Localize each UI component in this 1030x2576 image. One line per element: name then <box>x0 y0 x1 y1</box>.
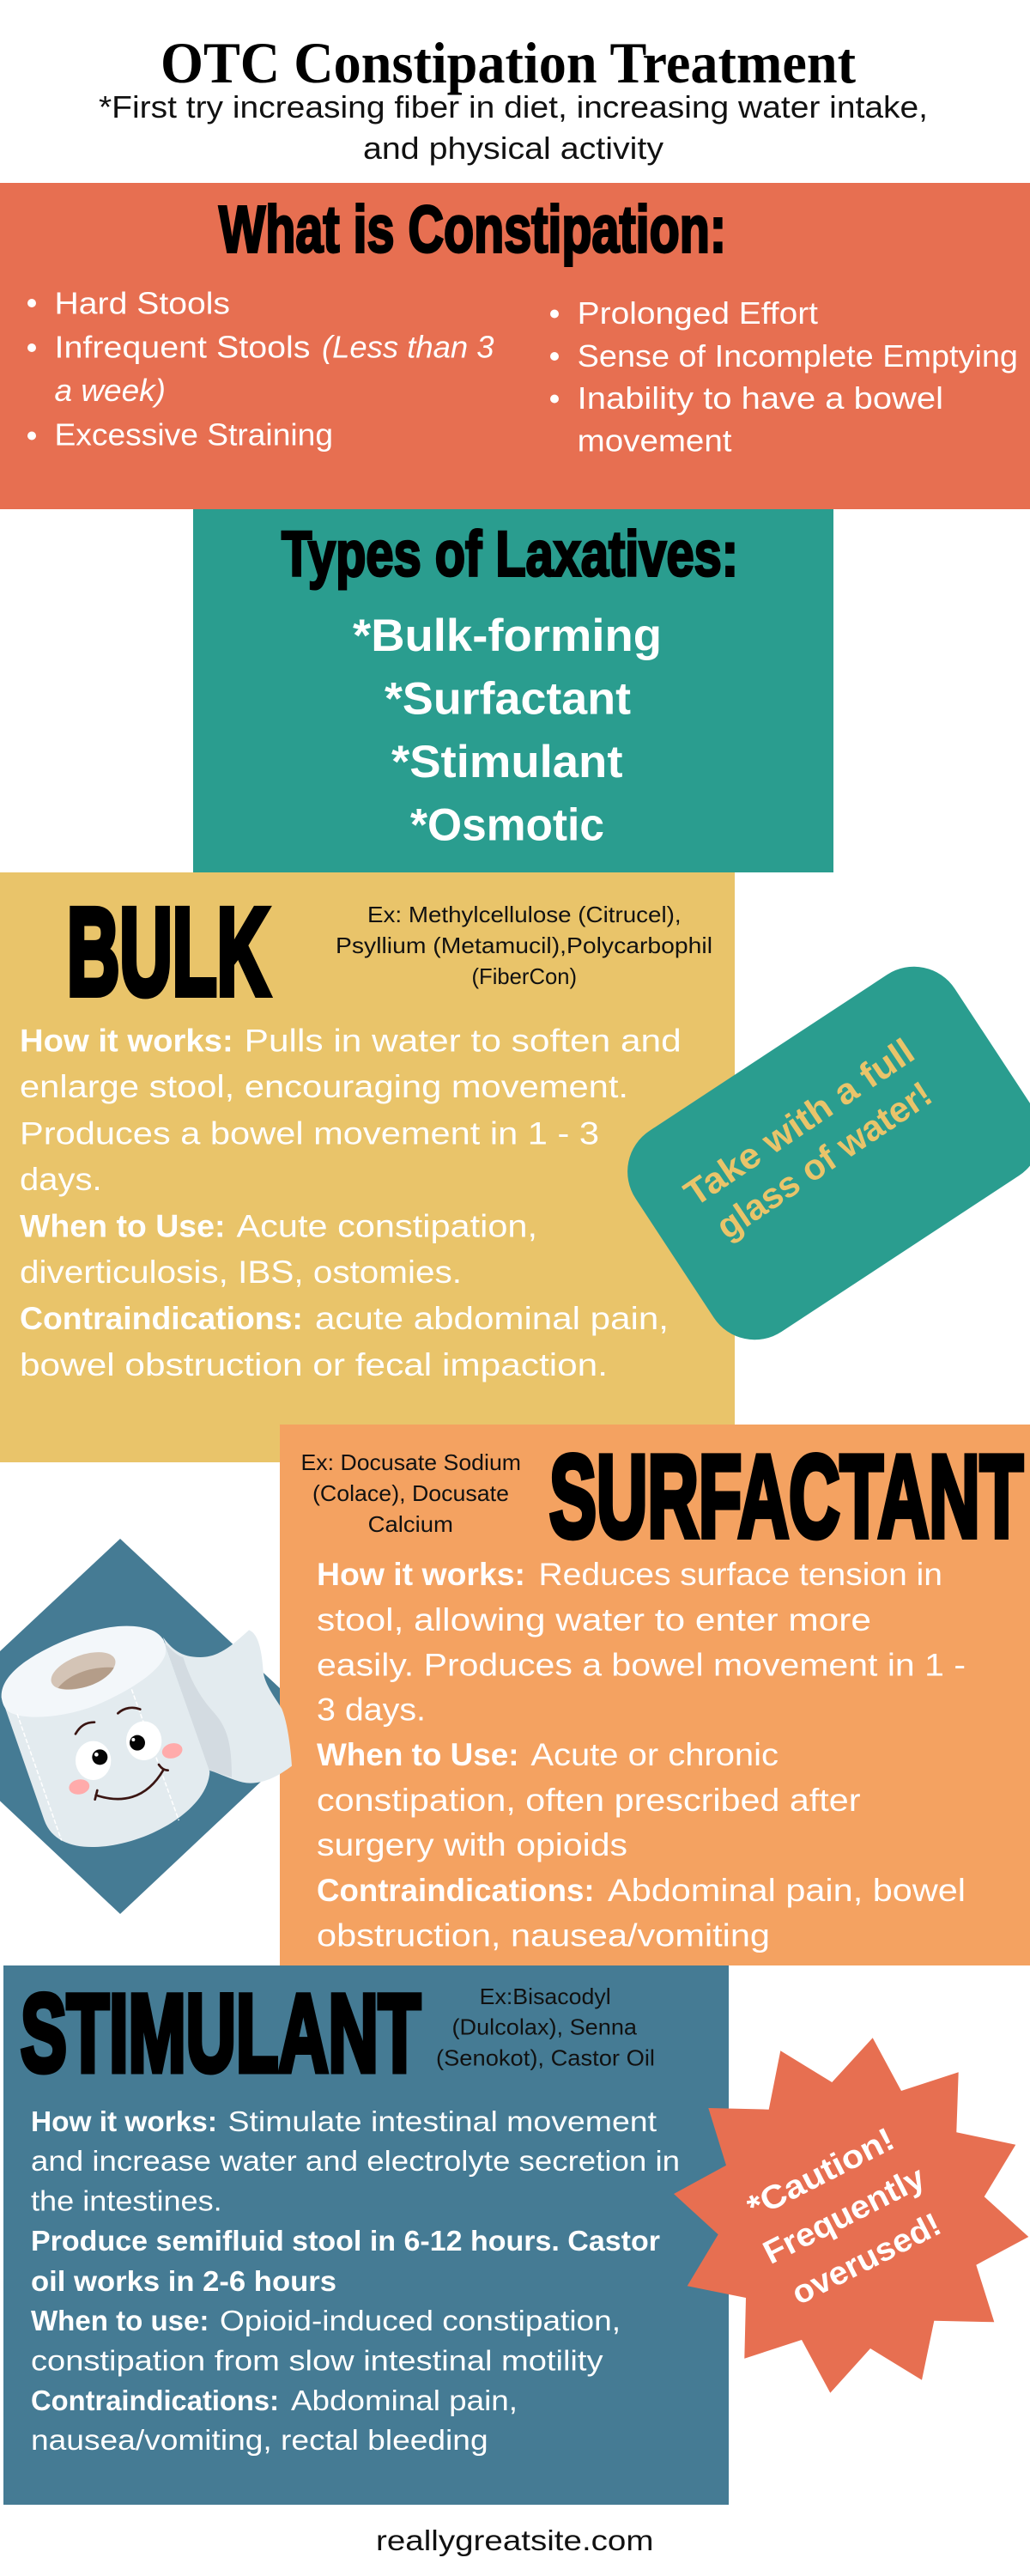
text block: surfactant details: How it works: <box>317 1557 525 1592</box>
text block: bulk details <box>20 1024 682 1382</box>
text block: stimulant details: oil works in 2-6 hours <box>31 2265 336 2297</box>
examples: stimulant: (Senokot), Castor Oil <box>436 2045 655 2071</box>
callout: caution starburst: Frequently <box>758 2160 930 2272</box>
examples: bulk: (FiberCon) <box>472 963 577 989</box>
panel: what is constipation <box>0 183 1030 509</box>
text block: bulk details: Contraindications: <box>20 1301 303 1336</box>
examples: stimulant: (Dulcolax), Senna <box>451 2014 638 2040</box>
callout: caution starburst <box>674 2038 1028 2393</box>
examples: bulk <box>336 902 712 989</box>
text block: stimulant details <box>31 2105 680 2456</box>
icon: blue diamond <box>0 1539 320 1914</box>
callout: take with water: glass of water! <box>709 1073 939 1247</box>
text block: stimulant details: Stimulate intestinal movement <box>228 2105 657 2137</box>
heading: what is constipation: What is Constipation: <box>219 192 726 266</box>
list: laxative types: *Bulk-forming <box>353 611 662 661</box>
panel: types of laxatives <box>193 509 833 872</box>
list: right symptoms: movement <box>578 422 731 459</box>
subtitle: and physical activity <box>363 131 663 166</box>
list: laxative types <box>353 611 662 850</box>
text block: stimulant details: the intestines. <box>31 2184 222 2217</box>
text block: bulk details: Pulls in water to soften and <box>245 1024 682 1059</box>
panel: bulk <box>0 872 735 1462</box>
text block: stimulant details: Opioid-induced constipation, <box>220 2305 621 2336</box>
list: left symptoms <box>27 285 494 452</box>
examples: surfactant: Calcium <box>368 1511 453 1537</box>
examples: surfactant: Ex: Docusate Sodium <box>300 1449 521 1475</box>
subtitle <box>99 89 928 166</box>
list: laxative types: *Osmotic <box>410 800 604 850</box>
examples: surfactant <box>300 1449 521 1537</box>
callout: caution starburst: overused! <box>786 2207 947 2312</box>
subtitle: *First try increasing fiber in diet, increasing water intake, <box>99 89 928 125</box>
list: right symptoms: Inability to have a bowel <box>578 380 943 416</box>
text block: stimulant details: constipation from slow intestinal motility <box>31 2345 603 2377</box>
text block: stimulant details: nausea/vomiting, rectal bleeding <box>31 2424 488 2456</box>
list: left symptoms: Infrequent Stools <box>55 330 311 364</box>
text block: surfactant details: surgery with opioids <box>317 1827 627 1862</box>
text block: surfactant details: constipation, often prescribed after <box>317 1783 860 1818</box>
text block: bulk details: When to Use: <box>20 1209 225 1244</box>
text block: surfactant details: easily. Produces a bowel movement in 1 - <box>317 1647 966 1682</box>
callout: caution starburst: *Caution! <box>742 2121 900 2226</box>
heading: stimulant: STIMULANT <box>21 1972 421 2095</box>
text block: stimulant details: Contraindications: <box>31 2385 279 2416</box>
text block: bulk details: How it works: <box>20 1024 233 1059</box>
text block: bulk details: acute abdominal pain, <box>315 1301 669 1336</box>
text block: bulk details: days. <box>20 1162 102 1197</box>
title: OTC Constipation Treatment <box>161 30 856 95</box>
examples: stimulant <box>436 1984 655 2071</box>
text block: stimulant details: Produce semifluid stool in 6-12 hours. Castor <box>31 2225 660 2257</box>
callout: take with water: Take with a full <box>676 1030 921 1214</box>
text block: bulk details: enlarge stool, encouraging movement. <box>20 1069 628 1104</box>
text block: surfactant details <box>317 1557 966 1953</box>
text block: bulk details: Produces a bowel movement in 1 - 3 <box>20 1116 599 1151</box>
text block: surfactant details: obstruction, nausea/vomiting <box>317 1918 770 1953</box>
text block: surfactant details: Reduces surface tension in <box>539 1557 942 1592</box>
callout: take with water <box>609 948 1030 1358</box>
examples: stimulant: Ex:Bisacodyl <box>480 1984 611 2009</box>
text block: surfactant details: Acute or chronic <box>530 1737 779 1772</box>
text block: surfactant details: Contraindications: <box>317 1873 595 1908</box>
panel: surfactant <box>280 1425 1030 1965</box>
list: right symptoms: Sense of Incomplete Emptying <box>578 338 1018 374</box>
text block: surfactant details: When to Use: <box>317 1737 519 1772</box>
text block: stimulant details: When to use: <box>31 2305 209 2336</box>
list: left symptoms: (Less than 3 <box>322 330 494 364</box>
list: left symptoms: a week) <box>55 373 166 408</box>
heading: types of laxatives: Types of Laxatives: <box>282 519 738 589</box>
heading: bulk: BULK <box>67 883 270 1021</box>
list: right symptoms: Prolonged Effort <box>578 295 818 331</box>
text block: surfactant details: stool, allowing water to enter more <box>317 1602 871 1637</box>
panel: stimulant <box>3 1965 729 2505</box>
list: laxative types: *Surfactant <box>385 673 631 725</box>
text block: surfactant details: 3 days. <box>317 1692 426 1728</box>
examples: bulk: Psyllium (Metamucil),Polycarbophil <box>336 933 712 958</box>
list: right symptoms <box>550 295 1018 459</box>
examples: bulk: Ex: Methylcellulose (Citrucel), <box>367 902 682 927</box>
list: laxative types: *Stimulant <box>391 737 623 787</box>
text block: bulk details: diverticulosis, IBS, ostomies. <box>20 1255 462 1290</box>
text block: bulk details: Acute constipation, <box>237 1209 537 1244</box>
text block: surfactant details: Abdominal pain, bowel <box>608 1873 966 1908</box>
text block: bulk details: bowel obstruction or fecal impaction. <box>20 1347 608 1382</box>
examples: surfactant: (Colace), Docusate <box>312 1480 509 1506</box>
list: left symptoms: Excessive Straining <box>55 417 333 452</box>
text block: stimulant details: and increase water and electrolyte secretion in <box>31 2145 680 2177</box>
list: left symptoms: Hard Stools <box>55 285 230 321</box>
footer: website: reallygreatsite.com <box>376 2524 654 2556</box>
text block: stimulant details: How it works: <box>31 2105 217 2137</box>
text block: stimulant details: Abdominal pain, <box>291 2385 518 2416</box>
icon: toilet roll character <box>2 1626 292 1847</box>
